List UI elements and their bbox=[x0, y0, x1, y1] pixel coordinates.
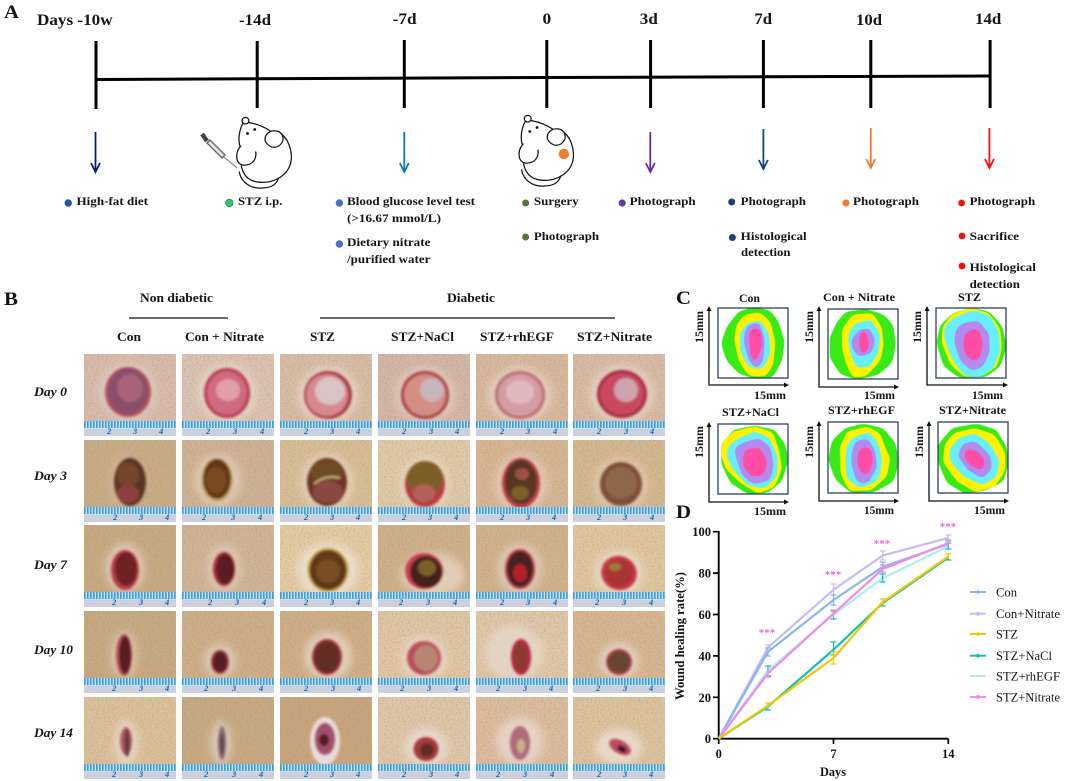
icon: mouse with injection bbox=[237, 117, 291, 188]
time labels: -7d bbox=[393, 11, 417, 28]
column headers: STZ+Nitrate bbox=[577, 330, 652, 344]
column headers: STZ+rhEGF bbox=[480, 330, 554, 344]
contour map: STZ+Nitrate bbox=[914, 405, 1009, 517]
contour map: STZ: STZ bbox=[958, 292, 981, 304]
legend: STZ+rhEGF bbox=[996, 668, 1060, 684]
row labels: Day 10 bbox=[33, 642, 74, 657]
y axis title: Wound healing rate(%) bbox=[673, 572, 687, 700]
panel D: wound healing rate chart bbox=[673, 502, 1060, 779]
photo: STZ day 7: 234 bbox=[303, 597, 360, 607]
photo: STZ+NaCl day 3 bbox=[378, 440, 470, 522]
photo: Con+Nitrate day 0 bbox=[182, 354, 274, 436]
y tick labels bbox=[692, 525, 711, 746]
photo: Con day 0: 234 bbox=[106, 426, 163, 436]
photo: Con day 14: 234 bbox=[111, 769, 169, 779]
row labels: Day 14 bbox=[33, 725, 74, 740]
photo: STZ+Nitrate day 3: 234 bbox=[596, 512, 654, 522]
icon: mouse with wound bbox=[519, 115, 573, 186]
photo: Con+Nitrate day 3: 234 bbox=[201, 512, 262, 522]
note: day -7: Blood glucose level test bbox=[347, 194, 475, 208]
contour map: STZ+rhEGF: STZ+rhEGF bbox=[828, 405, 895, 417]
photo: STZ+rhEGF day 0 bbox=[476, 354, 568, 436]
contour map: STZ+Nitrate: STZ+Nitrate bbox=[939, 405, 1006, 417]
photo: STZ+rhEGF day 10: 234 bbox=[495, 683, 553, 693]
contour map: Con + Nitrate bbox=[804, 292, 899, 402]
column headers bbox=[117, 330, 652, 344]
time labels: 14d bbox=[975, 11, 1002, 28]
x axis title: Days bbox=[820, 765, 846, 779]
photo: Con+Nitrate day 10: 234 bbox=[203, 683, 263, 693]
contour map: STZ+rhEGF bbox=[804, 405, 899, 517]
photo: STZ+NaCl day 14: 234 bbox=[401, 769, 459, 779]
column headers: Con bbox=[117, 330, 141, 344]
series: STZ+NaCl bbox=[719, 554, 951, 739]
timeline axis bbox=[96, 40, 990, 109]
photo: STZ+Nitrate day 0 bbox=[573, 354, 665, 436]
contour map: STZ+Nitrate: 15mm bbox=[974, 505, 1005, 517]
chart axes bbox=[713, 531, 948, 744]
time labels: -14d bbox=[239, 12, 271, 29]
photo: Con day 10: 234 bbox=[111, 683, 169, 693]
photo: Con+Nitrate day 10 bbox=[182, 611, 274, 693]
significance stars: *** bbox=[759, 627, 776, 639]
significance stars bbox=[759, 521, 957, 639]
photo: Con+Nitrate day 14: 234 bbox=[203, 769, 263, 779]
photo: STZ+NaCl day 7 bbox=[378, 525, 470, 607]
photo: STZ+rhEGF day 0: 234 bbox=[499, 426, 557, 436]
note: day 7: detection bbox=[741, 245, 791, 259]
arrow: day 14 bbox=[985, 128, 994, 168]
photo: STZ+NaCl day 3: 234 bbox=[401, 512, 458, 522]
time labels: Days -10w bbox=[37, 12, 113, 29]
photo: Con day 0 bbox=[84, 354, 176, 436]
contour map: STZ+NaCl: STZ+NaCl bbox=[722, 407, 779, 419]
panel letter B: B bbox=[4, 289, 18, 310]
photo: STZ+NaCl day 10 bbox=[378, 611, 470, 693]
photo: STZ day 7 bbox=[280, 525, 372, 607]
contour map: Con: 15mm bbox=[694, 311, 706, 343]
y tick labels: 100 bbox=[692, 525, 711, 539]
icon: syringe bbox=[202, 134, 237, 168]
photo: Con+Nitrate day 7: 234 bbox=[207, 597, 266, 607]
note: day 14: Photograph bbox=[970, 194, 1036, 208]
photo: STZ+rhEGF day 14 bbox=[476, 697, 568, 779]
panel letter A: A bbox=[4, 2, 19, 23]
time labels: 10d bbox=[856, 12, 882, 29]
arrow: day 3 bbox=[646, 132, 655, 172]
column headers: STZ bbox=[310, 330, 335, 344]
x tick labels: 7 bbox=[830, 747, 837, 761]
note: day 0 bbox=[522, 194, 599, 243]
arrow: blood glucose bbox=[400, 132, 409, 172]
photo: STZ+NaCl day 0 bbox=[378, 354, 470, 436]
photo: STZ+Nitrate day 14 bbox=[573, 697, 665, 779]
arrow: day 10 bbox=[866, 128, 875, 168]
photo: STZ+rhEGF day 10 bbox=[476, 611, 568, 693]
photo: STZ day 0 bbox=[280, 354, 372, 436]
row labels: Day 0 bbox=[33, 384, 68, 399]
photo: Con+Nitrate day 3 bbox=[182, 440, 274, 522]
photo: STZ+Nitrate day 0: 234 bbox=[596, 426, 654, 436]
contour map: Con: 15mm bbox=[754, 390, 786, 402]
contour map: Con + Nitrate: 15mm bbox=[864, 390, 895, 402]
photo: STZ day 14 bbox=[280, 697, 372, 779]
photo: Con+Nitrate day 7 bbox=[182, 525, 274, 607]
photo: STZ day 0: 234 bbox=[303, 426, 360, 436]
note: day -7: /purified water bbox=[346, 252, 431, 266]
time labels: 3d bbox=[640, 11, 658, 28]
group header: diabetic: Diabetic bbox=[447, 291, 495, 305]
legend: STZ+NaCl bbox=[996, 648, 1052, 663]
photo: STZ+rhEGF day 3 bbox=[476, 440, 568, 522]
photo: STZ day 10 bbox=[280, 611, 372, 693]
column headers: Con + Nitrate bbox=[185, 330, 264, 344]
note: day 14: Histological bbox=[970, 260, 1037, 274]
time labels: 0 bbox=[542, 11, 551, 28]
y tick labels: 40 bbox=[698, 650, 711, 664]
column headers: STZ+NaCl bbox=[391, 330, 455, 344]
photo: STZ+rhEGF day 14: 234 bbox=[495, 769, 554, 779]
contour map: STZ+rhEGF: 15mm bbox=[804, 426, 816, 458]
legend bbox=[970, 584, 1060, 704]
photo: STZ+rhEGF day 3: 234 bbox=[499, 512, 556, 522]
photo: STZ day 10: 234 bbox=[303, 683, 361, 693]
photo: STZ day 3: 234 bbox=[303, 512, 360, 522]
photo: Con+Nitrate day 0: 234 bbox=[205, 426, 264, 436]
significance stars: *** bbox=[825, 569, 842, 581]
group header: non diabetic: Non diabetic bbox=[140, 291, 213, 305]
note: day 14: detection bbox=[970, 277, 1020, 291]
note: day 3: Photograph bbox=[630, 194, 696, 208]
panel letter C: C bbox=[676, 288, 691, 309]
series: STZ+Nitrate bbox=[719, 540, 951, 739]
photo: STZ+NaCl day 0: 234 bbox=[401, 426, 459, 436]
panel B: wound photographs bbox=[4, 289, 665, 779]
series: STZ bbox=[719, 554, 951, 739]
photo: STZ+NaCl day 7: 234 bbox=[398, 597, 457, 607]
y tick labels: 0 bbox=[705, 732, 711, 746]
photo: Con day 7 bbox=[84, 525, 176, 607]
photo: STZ+Nitrate day 10 bbox=[573, 611, 665, 693]
contour map: STZ+Nitrate: 15mm bbox=[914, 426, 926, 458]
note: day 14: Sacrifice bbox=[970, 229, 1020, 243]
legend: STZ bbox=[996, 626, 1018, 642]
contour map: STZ+NaCl bbox=[694, 407, 789, 518]
photo: STZ+rhEGF day 7 bbox=[476, 525, 568, 607]
photo: Con+Nitrate day 14 bbox=[182, 697, 274, 779]
photo: Con day 7: 234 bbox=[111, 597, 169, 607]
contour map: STZ+rhEGF: 15mm bbox=[864, 505, 894, 517]
legend: STZ+Nitrate bbox=[996, 690, 1060, 704]
photo: STZ+Nitrate day 14: 234 bbox=[596, 769, 653, 779]
arrow: high-fat diet bbox=[91, 132, 100, 172]
contour map: STZ bbox=[912, 292, 1008, 402]
row labels: Day 7 bbox=[33, 557, 68, 572]
legend: Con+Nitrate bbox=[996, 606, 1060, 621]
panel A: experimental timeline bbox=[4, 2, 1037, 291]
legend: Con bbox=[996, 584, 1017, 600]
photo: STZ+Nitrate day 3 bbox=[573, 440, 665, 522]
contour map: Con: Con bbox=[739, 293, 761, 305]
note: day 7: Histological bbox=[741, 229, 807, 243]
time labels bbox=[37, 11, 1002, 29]
note: day 10: Photograph bbox=[853, 194, 919, 208]
y tick labels: 80 bbox=[698, 566, 711, 580]
photo: Con day 14 bbox=[84, 697, 176, 779]
note: day -7 bbox=[336, 194, 475, 266]
note: day 7 bbox=[728, 194, 807, 259]
note: day 14 bbox=[958, 194, 1037, 291]
x tick labels: 0 bbox=[716, 747, 722, 761]
contour map: STZ+NaCl: 15mm bbox=[754, 506, 786, 518]
photo: STZ+NaCl day 14 bbox=[378, 697, 470, 779]
photo: STZ+Nitrate day 7: 234 bbox=[594, 597, 653, 607]
y tick labels: 60 bbox=[698, 608, 711, 622]
series: Con+Nitrate bbox=[719, 535, 951, 739]
row labels bbox=[33, 384, 74, 740]
contour map: STZ: 15mm bbox=[912, 311, 924, 343]
group header: non diabetic bbox=[129, 291, 228, 318]
photo: STZ+Nitrate day 10: 234 bbox=[595, 683, 653, 693]
note: high-fat diet: High-fat diet bbox=[76, 194, 148, 208]
photo: STZ+rhEGF day 7: 234 bbox=[499, 597, 557, 607]
arrow: day 7 bbox=[759, 129, 768, 169]
x tick labels: 14 bbox=[942, 747, 955, 761]
note: day -7: Dietary nitrate bbox=[347, 235, 431, 249]
note: STZ injection: STZ i.p. bbox=[238, 194, 282, 208]
note: day 7: Photograph bbox=[741, 194, 806, 208]
contour map: STZ+NaCl: 15mm bbox=[694, 426, 706, 458]
photo: Con day 10 bbox=[84, 611, 176, 693]
photo: Con day 3 bbox=[84, 440, 176, 522]
significance stars: *** bbox=[874, 538, 891, 550]
panel C: wound contour maps bbox=[676, 288, 1009, 518]
note: day -7: (>16.67 mmol/L) bbox=[347, 211, 441, 225]
contour map: Con bbox=[694, 293, 789, 402]
contour map: Con + Nitrate: Con + Nitrate bbox=[823, 292, 895, 304]
significance stars: *** bbox=[940, 521, 957, 533]
note: day 0: Surgery bbox=[534, 194, 579, 208]
photo: STZ+Nitrate day 7 bbox=[573, 525, 665, 607]
series: Con bbox=[719, 541, 951, 739]
panel letter D: D bbox=[676, 502, 691, 523]
y tick labels: 20 bbox=[698, 691, 711, 705]
photo: STZ day 3 bbox=[280, 440, 372, 522]
note: day 0: Photograph bbox=[534, 229, 599, 243]
row labels: Day 3 bbox=[33, 468, 68, 483]
photo: STZ+NaCl day 10: 234 bbox=[399, 683, 458, 693]
x tick labels bbox=[716, 747, 955, 761]
photo: STZ day 14: 234 bbox=[303, 769, 360, 779]
photo: Con day 3: 234 bbox=[112, 512, 169, 522]
time labels: 7d bbox=[754, 11, 772, 28]
contour map: Con + Nitrate: 15mm bbox=[804, 311, 816, 343]
series: STZ+rhEGF bbox=[719, 543, 951, 739]
contour map: STZ: 15mm bbox=[972, 390, 1003, 402]
